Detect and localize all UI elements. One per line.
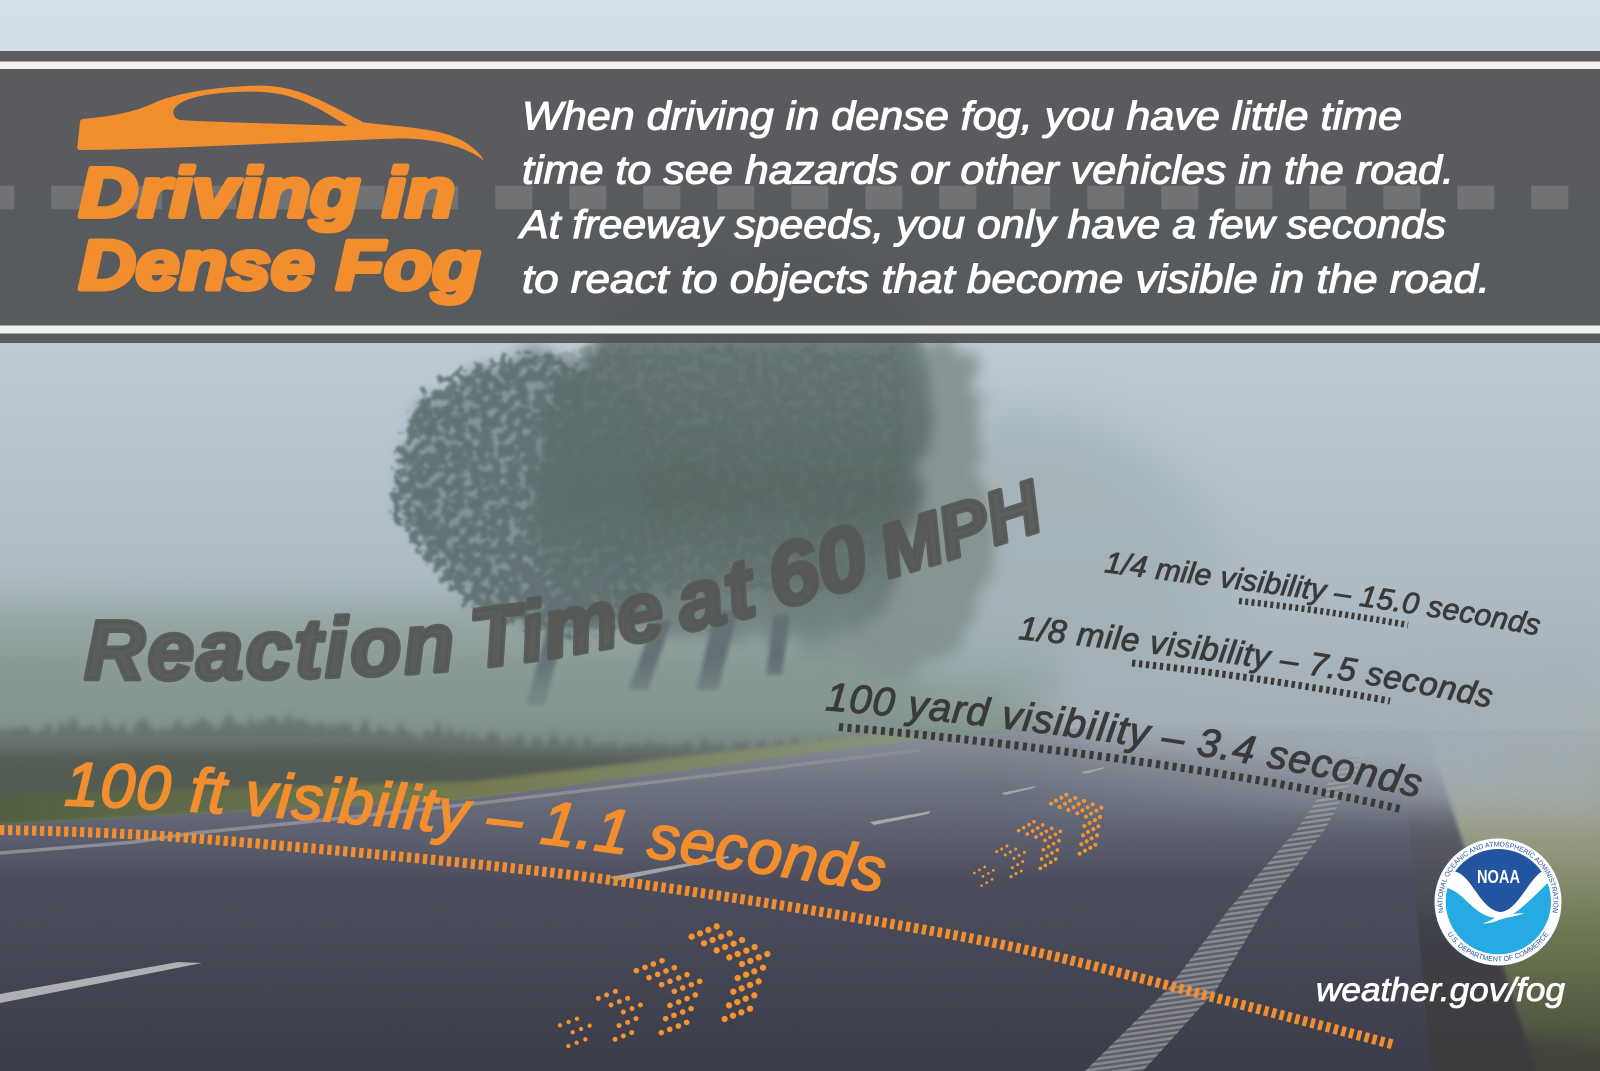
label: 100 yard visibility: 100 yard visibility – 3.4 seconds: [825, 683, 1422, 796]
dashed marker line: [839, 727, 1400, 809]
left tree canopy: [392, 352, 650, 640]
distant rumble strip: [1346, 712, 1386, 757]
chevron 3: [1019, 822, 1060, 868]
road markings: [0, 750, 1364, 1071]
road centre dashes: [0, 186, 1600, 209]
foggy field: [0, 585, 1060, 840]
label: 1/8 mile visibility: 1/8 mile visibility – 7.5 seconds: [1018, 617, 1493, 707]
left tree soft base: [400, 355, 650, 632]
icon: NOAA seal: [1434, 838, 1562, 966]
seal NOAA wordmark: NOAA: [1477, 867, 1520, 887]
logo: orange car silhouette: [77, 86, 484, 160]
intro paragraph: to react to objects that become visible in the road.: [522, 258, 1490, 302]
brush at field edge: [0, 722, 900, 815]
right tree lobe: [800, 345, 996, 672]
title: [79, 154, 480, 304]
rumble strip: [1085, 757, 1364, 1071]
road grain: [0, 730, 1600, 1071]
heading: Reaction Time at 60 MPH: Reaction Time at 60 MPH: [84, 478, 1040, 682]
title: Dense Fog: [79, 226, 480, 304]
chevron 2: [997, 846, 1024, 877]
website url: weather.gov/fog: [1316, 971, 1566, 1008]
chevron 4: [1051, 795, 1101, 854]
seal emblem: [1446, 849, 1551, 954]
far dotted chevrons: [974, 795, 1101, 886]
dark ground, bottom-right corner: [1500, 1030, 1600, 1071]
right-side fog wash: [1000, 640, 1600, 810]
dashed marker line: [1239, 601, 1408, 625]
far-road fog: [1000, 690, 1500, 790]
seal ring text top: NATIONAL OCEANIC AND ATMOSPHERIC ADMINISTRATION: [1438, 842, 1558, 913]
road surface: [0, 725, 1432, 1071]
main tree leaf texture: [552, 350, 908, 590]
main tree canopy: [534, 245, 929, 643]
dashed orange line: [0, 830, 1395, 1045]
seal ring text bottom: U.S. DEPARTMENT OF COMMERCE: [1448, 932, 1548, 962]
intro paragraph: When driving in dense fog, you have little time: [522, 94, 1402, 138]
label: 100 ft visibility: 100 ft visibility – 1.1 seconds: [64, 762, 886, 892]
dark road shoulder: [1390, 725, 1540, 1071]
label: 1/4 mile visibility: 1/4 mile visibility – 15.0 seconds: [1104, 552, 1540, 635]
intro paragraph: time to see hazards or other vehicles in the road.: [522, 148, 1454, 192]
grass strip left of road: [0, 733, 950, 826]
intro paragraph: At freeway speeds, you only have a few seconds: [518, 203, 1446, 247]
near dotted chevrons: [560, 926, 767, 1046]
chevron 3: [636, 961, 700, 1033]
title: Driving in: [79, 154, 455, 232]
grass right of road: [1415, 690, 1600, 1071]
chevron 1: [560, 1019, 590, 1046]
header band: [0, 51, 1600, 343]
intro paragraph: [518, 94, 1490, 302]
chevron 1: [974, 867, 993, 886]
low fog over field: [0, 670, 1060, 745]
tree trunks: [512, 560, 790, 705]
label: 100 ft visibility: [0, 762, 1394, 1049]
chevron 4: [692, 926, 767, 1019]
chevron 2: [598, 991, 640, 1039]
dashed marker line: [1132, 663, 1390, 701]
distant tree: [900, 414, 1222, 712]
